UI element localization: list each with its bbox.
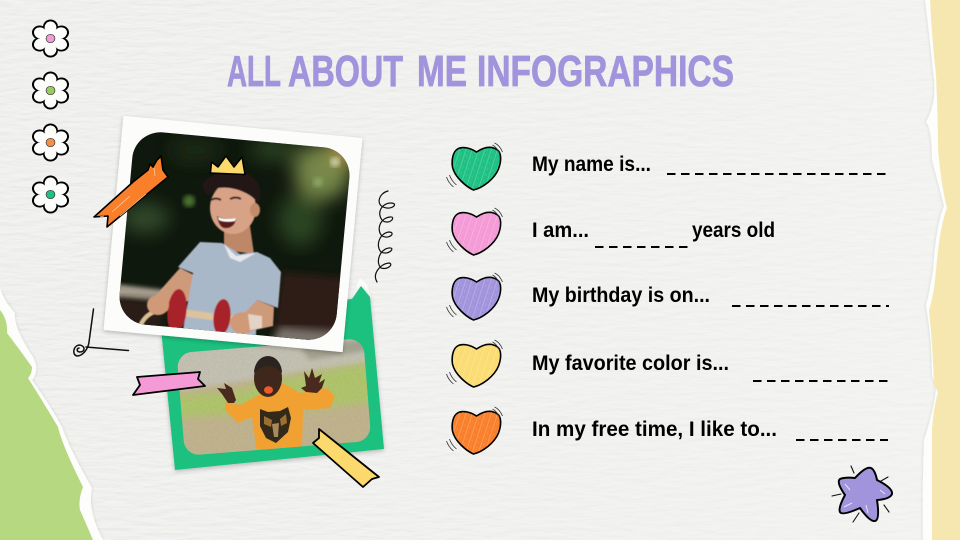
icon: flower pink: [33, 20, 68, 57]
text: i am: I am...: [532, 219, 589, 242]
crown: [210, 156, 245, 174]
text: favorite color: My favorite color is...: [532, 352, 729, 375]
hoodie: [225, 383, 335, 454]
flower icons: [33, 20, 68, 213]
list of prompts: [446, 143, 889, 454]
hands: [147, 295, 169, 315]
text: free time: In my free time, I like to...: [532, 418, 777, 441]
pink ribbon: [133, 372, 205, 395]
icon: purple star: [832, 466, 892, 522]
icon: pink heart: [446, 208, 502, 255]
blurred foliage: [121, 136, 359, 246]
neck: [224, 226, 254, 254]
fill-in line: [595, 246, 688, 248]
fill-in line: [667, 173, 886, 175]
photo background grass: [172, 362, 375, 418]
photo background trees: [178, 339, 366, 392]
icon: green heart: [446, 143, 502, 190]
photo: child in orange hoodie: [178, 339, 370, 455]
icon: flower orange: [33, 124, 68, 161]
yellow ribbon: [313, 429, 379, 487]
left arm: [156, 268, 194, 312]
polaroid frame: [104, 116, 362, 352]
title: ME: [417, 47, 467, 96]
bear print: [260, 407, 291, 443]
row 3: birthday: [446, 273, 889, 320]
blurred bench and ground: [269, 270, 340, 340]
green photo frame: [160, 278, 384, 470]
icon: purple heart: [446, 273, 502, 320]
mouth: [217, 216, 236, 228]
fill-in line: [732, 305, 889, 307]
photo: laughing boy: [120, 132, 350, 340]
hair: [203, 172, 260, 203]
row 2: age: [446, 208, 775, 255]
text: my birthday: My birthday is on...: [532, 284, 710, 307]
title: ALL: [227, 47, 281, 96]
red grips: [166, 288, 188, 328]
torn paper: green corner: [0, 287, 103, 540]
t-shirt: [178, 242, 281, 336]
title: INFOGRAPHICS: [477, 47, 734, 96]
wooden handlebar: [185, 309, 233, 322]
fill-in line: [796, 439, 888, 441]
text: years old: years old: [692, 219, 775, 242]
row 4: favorite color: [446, 340, 888, 387]
icon: flower green: [33, 72, 68, 109]
fill-in line: [753, 380, 888, 382]
eyes: [211, 198, 241, 200]
head: [254, 366, 282, 397]
loop doodle: [74, 309, 128, 356]
torn paper: yellow edge: [923, 0, 960, 540]
curly doodle: [375, 191, 395, 282]
row 1: name: [446, 143, 886, 190]
icon: orange heart: [446, 407, 502, 454]
right arm: [246, 300, 275, 331]
row 5: free time: [446, 407, 888, 454]
head: [210, 182, 256, 234]
text: my name is: My name is...: [532, 153, 651, 176]
icon: yellow heart: [446, 340, 502, 387]
tongue: [264, 386, 273, 394]
title: ABOUT: [288, 47, 403, 96]
title: [227, 47, 734, 96]
hands: [217, 383, 236, 403]
orange ribbon: [94, 156, 168, 227]
icon: flower teal: [33, 176, 68, 213]
